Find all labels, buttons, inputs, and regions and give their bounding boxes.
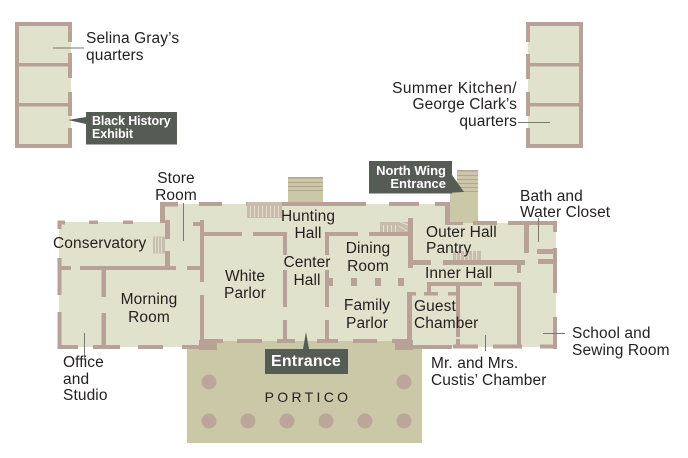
label: Bath and Water Closet: Water Closet <box>520 204 611 221</box>
callout: Black History Exhibit <box>68 112 177 144</box>
label: Morning Room: Room <box>128 309 170 326</box>
label: Outer Hall Pantry <box>426 224 497 257</box>
label: Office and Studio: and <box>63 371 89 388</box>
label: Office and Studio <box>63 333 108 404</box>
portico <box>187 340 422 443</box>
walls <box>58 202 557 350</box>
callout: North Wing Entrance <box>369 161 464 194</box>
panel: Selina Gray's quarters and Black History Exhibit building <box>15 22 72 148</box>
label: Mr. and Mrs. Custis' Chamber: Custis’ Chamber <box>431 372 546 389</box>
label: Summer Kitchen / George Clark's quarters: Summer Kitchen/ <box>392 80 517 97</box>
label: Store Room <box>155 170 197 241</box>
label: Summer Kitchen / George Clark's quarters: George Clark’s <box>412 96 517 113</box>
label: Outer Hall Pantry: Pantry <box>426 240 472 257</box>
panel: Summer Kitchen building <box>526 22 583 148</box>
label: Family Parlor: Family <box>344 297 390 314</box>
label: Outer Hall Pantry: Outer Hall <box>426 224 497 241</box>
label: Center Hall: Hall <box>293 272 321 289</box>
label: Conservatory: Conservatory <box>53 235 147 252</box>
callout: Entrance: Entrance <box>271 353 341 370</box>
label: Selina Gray's quarters <box>53 30 179 64</box>
label: Store Room: Store <box>157 170 195 187</box>
stairs: interior <box>153 202 481 260</box>
label: School and Sewing Room <box>543 325 670 359</box>
label: Summer Kitchen / George Clark's quarters <box>392 80 550 130</box>
portico label: PORTICO <box>265 389 351 405</box>
callout: Entrance <box>265 332 348 374</box>
stairs: North Wing steps <box>450 170 478 223</box>
panel: main house floor plan <box>58 202 557 350</box>
label: Family Parlor <box>344 297 390 332</box>
label: Center Hall <box>283 254 331 289</box>
label: Bath and Water Closet <box>520 188 611 242</box>
label: Hunting Hall: Hall <box>294 225 322 242</box>
portico columns <box>202 374 412 428</box>
label: White Parlor: White <box>225 268 265 285</box>
label: Dining Room <box>346 240 390 275</box>
label: Bath and Water Closet: Bath and <box>520 188 583 205</box>
stairs: Hunting Hall steps <box>288 177 323 203</box>
label: Mr. and Mrs. Custis' Chamber <box>431 335 546 389</box>
label: Guest Chamber <box>414 298 478 332</box>
label: Hunting Hall <box>281 208 335 242</box>
label: Center Hall: Center <box>283 254 331 271</box>
callout: Black History Exhibit: Exhibit <box>92 127 134 141</box>
label: Store Room: Room <box>155 187 197 204</box>
label: Guest Chamber: Guest <box>414 298 456 315</box>
label: White Parlor <box>224 268 266 302</box>
label: Summer Kitchen / George Clark's quarters: quarters <box>459 113 517 130</box>
label: Morning Room <box>121 291 177 326</box>
label: Mr. and Mrs. Custis' Chamber: Mr. and Mrs. <box>431 355 518 372</box>
label: Office and Studio: Studio <box>63 387 108 404</box>
label: Guest Chamber: Chamber <box>414 315 478 332</box>
label: Selina Gray's quarters: quarters <box>86 47 144 64</box>
floor <box>59 204 556 347</box>
label: Selina Gray's quarters: Selina Gray’s <box>86 30 179 47</box>
label: Hunting Hall: Hunting <box>281 208 335 225</box>
label: Family Parlor: Parlor <box>346 315 388 332</box>
label: School and Sewing Room: Sewing Room <box>572 342 670 359</box>
label: Inner Hall: Inner Hall <box>425 265 492 282</box>
label: Dining Room: Room <box>347 258 389 275</box>
label: Morning Room: Morning <box>121 291 177 308</box>
label: Office and Studio: Office <box>63 354 104 371</box>
label: School and Sewing Room: School and <box>572 325 651 342</box>
callout: Black History Exhibit: Black History <box>92 114 171 128</box>
callout: North Wing Entrance: Entrance <box>390 176 446 191</box>
callout: North Wing Entrance: North Wing <box>376 163 446 178</box>
label: White Parlor: Parlor <box>224 285 266 302</box>
label: Dining Room: Dining <box>346 240 390 257</box>
